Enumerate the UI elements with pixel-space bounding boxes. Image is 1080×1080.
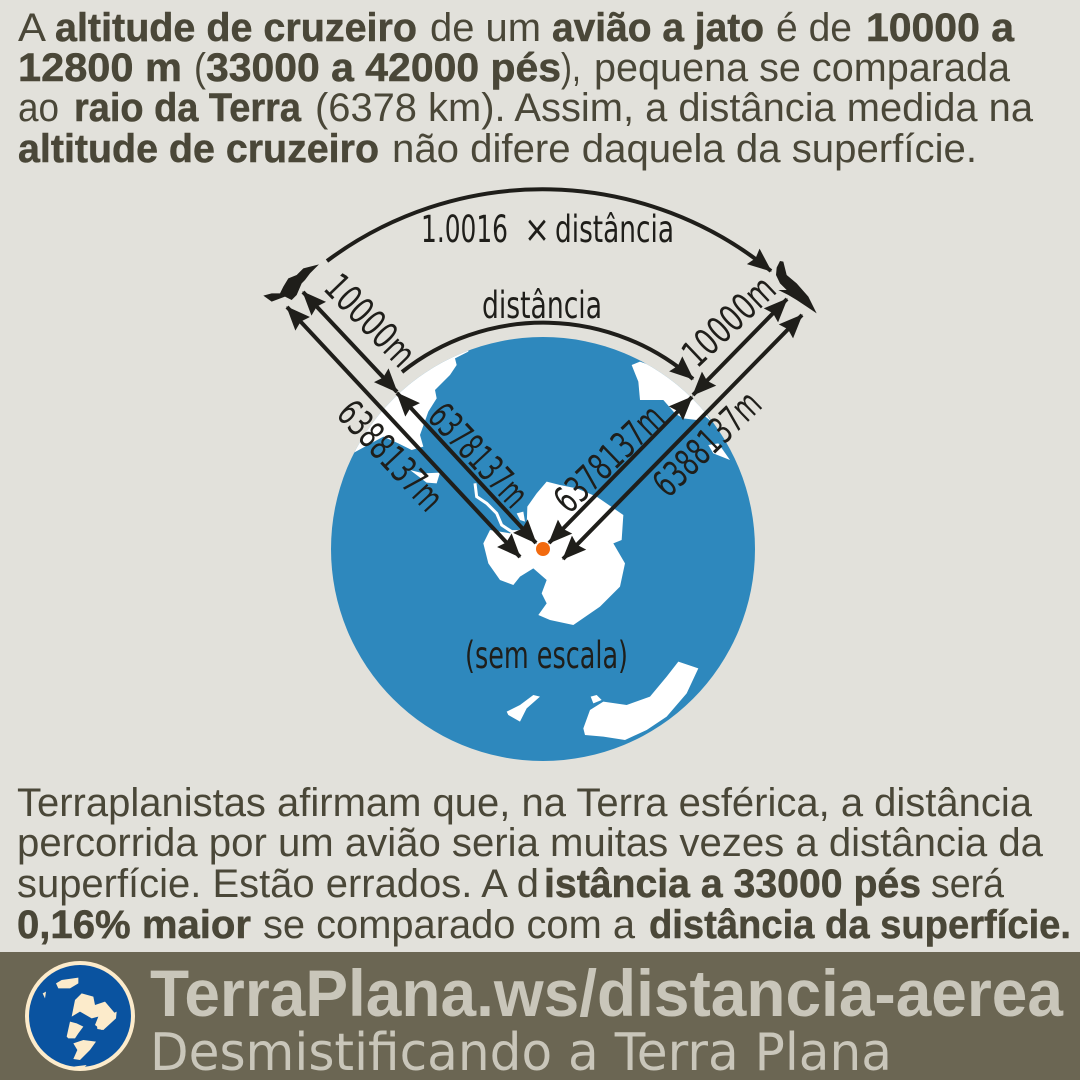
bottom text block: será [931, 862, 1005, 906]
plane left [263, 264, 319, 302]
plane right [776, 261, 817, 313]
bottom text block: distância da superfície. [649, 903, 1071, 947]
label: left inner radius: 6378137m [419, 395, 537, 516]
label: distância: distância [482, 284, 602, 327]
top text block: altitude de cruzeiro [18, 127, 379, 171]
top text block: (6378 km). Assim, a distância medida na [315, 86, 1034, 130]
label: 1.0016 × distância: distância [555, 208, 674, 251]
bottom text block: 0,16% maior [17, 903, 251, 947]
top text block: pequena se comparada [594, 46, 1011, 90]
top text block: altitude de cruzeiro [55, 6, 417, 50]
bottom text block: percorrida por um avião seria muitas vezes a distância da [17, 821, 1044, 865]
bottom text block: superfície. Estão errados. A d [17, 862, 539, 906]
globe [331, 337, 755, 761]
bottom text block [17, 781, 1071, 947]
arcs and arrows [287, 189, 802, 559]
top text block: ( [194, 46, 207, 90]
center point [536, 542, 550, 556]
top text block: ), [561, 46, 581, 90]
label: right outer radius: 6388137m [644, 382, 770, 505]
bottom text block: istância a 33000 pés [544, 862, 921, 906]
label: left outer radius: 6388137m [328, 392, 452, 520]
label: 1.0016 × distância [421, 208, 674, 251]
top text block: não difere daquela da superfície. [392, 127, 977, 171]
upper left land [354, 350, 468, 484]
label: right inner radius: 6378137m [545, 396, 673, 521]
label: left 10000m: 10000m [316, 265, 424, 376]
footer logo [25, 961, 135, 1071]
top text block: de um [430, 6, 541, 50]
footer band [0, 952, 1080, 1080]
upper right land [632, 362, 730, 460]
top text block: raio da Terra [74, 86, 302, 130]
top text block: ao [18, 86, 59, 130]
bottom text block: Terraplanistas afirmam que, na Terra esférica, a distância [17, 781, 1033, 825]
label: 1.0016 × distância: × [524, 208, 550, 251]
top text block: avião a jato [552, 6, 764, 50]
continents [340, 340, 730, 740]
top text block: 33000 a 42000 pés [206, 46, 561, 90]
antarctica and southern land [475, 482, 698, 740]
top text block [18, 6, 1034, 171]
footer title: TerraPlana.ws/distancia-aerea [150, 956, 1064, 1030]
top text block: A [18, 6, 46, 50]
bottom text block: se comparado com a [263, 903, 636, 947]
label: right 10000m: 10000m [674, 267, 784, 376]
label: 1.0016 × distância: 1.0016 [421, 208, 508, 251]
label: sem escala: (sem escala) [465, 634, 628, 677]
top text block: 12800 m [18, 46, 182, 90]
top text block: é de [776, 6, 852, 50]
top text block: 10000 a [866, 6, 1015, 50]
